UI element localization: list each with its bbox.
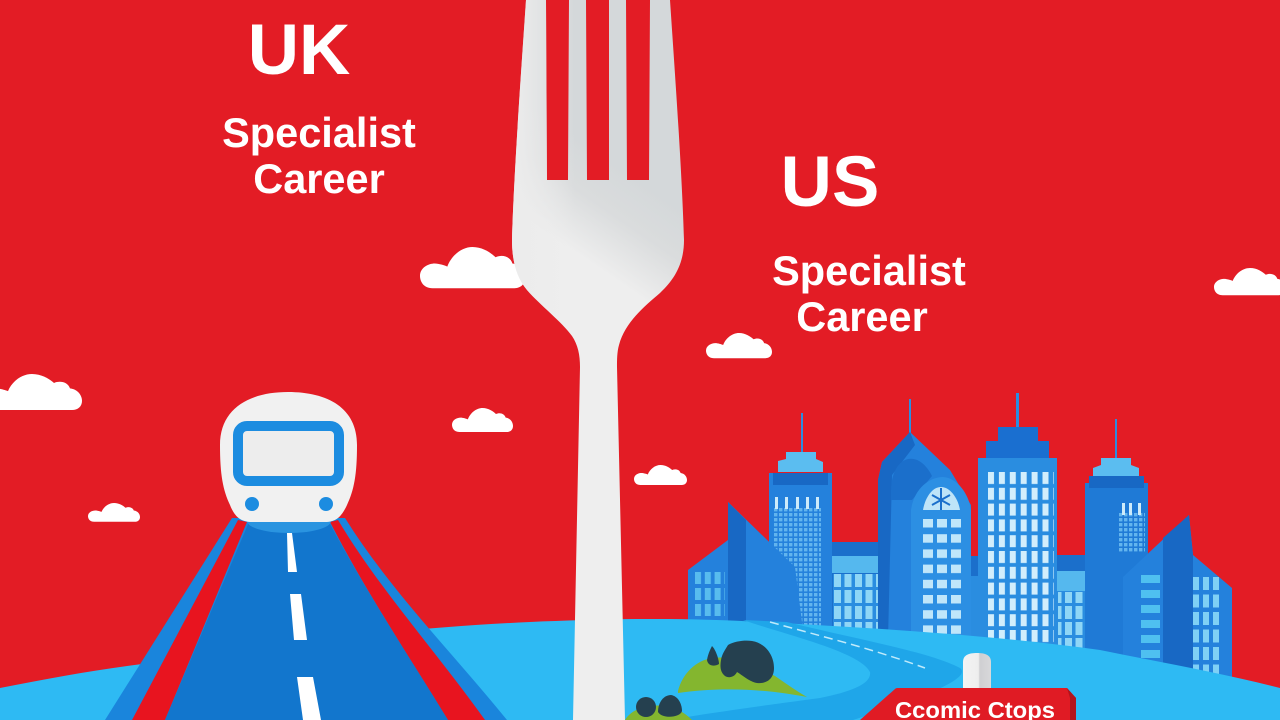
train body (220, 392, 357, 522)
hill with trees (678, 641, 807, 697)
road (105, 518, 507, 720)
sign edge shade (1067, 688, 1076, 720)
sign board (860, 688, 1076, 720)
heading: US column: US (781, 143, 879, 222)
road red stripes (132, 520, 485, 720)
heading: US column: Career (796, 293, 928, 340)
heading: US column (772, 143, 966, 340)
heading: UK column: UK (248, 11, 350, 90)
sign post (963, 653, 991, 690)
city skyline (688, 393, 1232, 685)
winding path (687, 620, 962, 720)
road sign (860, 653, 1076, 720)
train (220, 392, 357, 533)
fork left highlight (512, 0, 684, 720)
train shadow (247, 509, 331, 533)
road surface (165, 522, 448, 720)
heading: UK column: Specialist (222, 109, 416, 156)
road outer edge (105, 518, 507, 720)
clouds (0, 247, 1280, 522)
fork (512, 0, 684, 720)
road dashes (287, 533, 321, 720)
lower hill with bushes (625, 695, 692, 720)
ground (0, 619, 1280, 720)
heading: UK column (222, 11, 416, 202)
train headlights (245, 497, 333, 511)
heading: US column: Specialist (772, 247, 966, 294)
heading: UK column: Career (253, 155, 385, 202)
train window (238, 426, 339, 481)
fork body (512, 0, 684, 720)
